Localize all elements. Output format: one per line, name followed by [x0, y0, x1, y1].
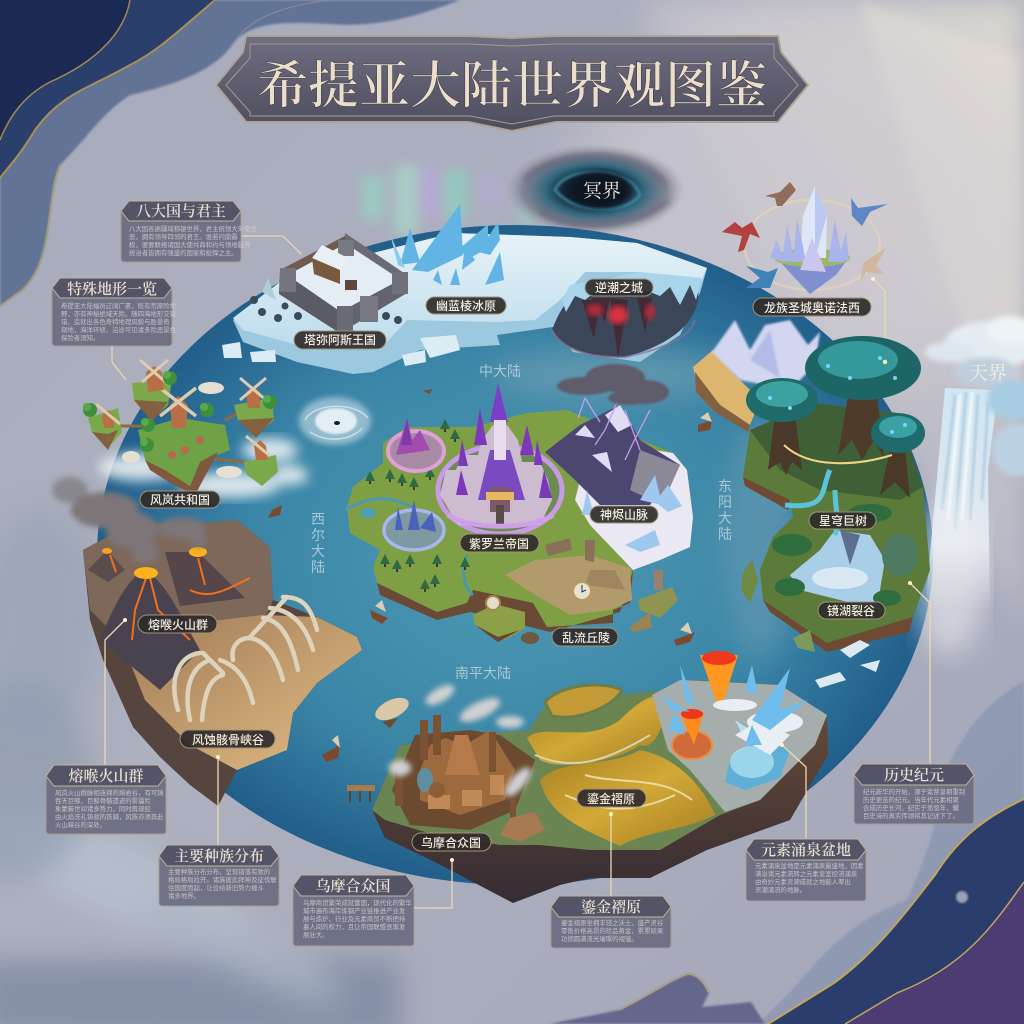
card: 特殊地形一览: 野，亦有神秘绝域天险。随四海地形交错	[61, 309, 177, 318]
label: 逆潮之城	[585, 279, 653, 296]
label: 紫罗兰帝国	[460, 534, 539, 552]
card: 乌摩合众国: 乌摩商贸繁荣成就富国，现代化的繁华	[303, 898, 412, 907]
card: 八大国与君主: 八大国各据疆域称雄世界，君主统领大朱使堡	[129, 224, 257, 233]
fortress: 塔弥阿斯王国	[250, 233, 408, 332]
airships	[122, 382, 242, 478]
label: 塔弥阿斯王国: 塔弥阿斯王国	[304, 332, 376, 347]
card: 八大国与君主: 八大国与君主	[136, 203, 226, 220]
label: 镜湖裂谷: 镜湖裂谷	[827, 603, 875, 618]
label: 星穹巨树: 星穹巨树	[819, 513, 867, 528]
label: 幽蓝棱冰原	[426, 297, 506, 314]
label: 乌摩合众国: 乌摩合众国	[421, 835, 481, 850]
card: 熔喉火山群: 吞天巨鲸，巨鲸骨骸遗迹的雾霾险	[55, 796, 151, 805]
card: 主要种族分布	[159, 845, 279, 906]
dock	[347, 785, 375, 802]
connector: history	[910, 583, 930, 764]
label: 幽蓝棱冰原: 幽蓝棱冰原	[436, 298, 496, 313]
card: 特殊地形一览: 希提亚大陆幅员辽阔广袤，既有荒原险地	[61, 301, 177, 310]
small ring fortress: pink	[388, 418, 444, 471]
snow field	[575, 440, 693, 570]
label: 鎏金褶原: 鎏金褶原	[587, 791, 635, 806]
label: 熔喉火山群	[138, 615, 217, 633]
crystals: 幽蓝棱冰原	[390, 204, 504, 285]
connectors	[782, 745, 806, 839]
ocean labels: 大	[311, 543, 325, 559]
waterfall and cloud: heavenly realm	[914, 316, 1024, 655]
ocean labels: 阳	[718, 494, 732, 510]
rope bridges	[115, 412, 245, 462]
small gold island	[545, 685, 622, 717]
ocean labels: 陆	[718, 526, 732, 542]
ice crystals	[582, 475, 682, 552]
ocean: haze near ice	[490, 349, 796, 660]
lake	[790, 530, 885, 610]
card: 元素涌泉盆地: 满溢诸元素流转之元素皇室控流涌泉	[755, 869, 858, 878]
card: 熔喉火山群: 熔喉火山群	[67, 768, 144, 785]
label: 乌摩合众国	[412, 833, 491, 851]
hills: 乱流丘陵	[473, 538, 678, 644]
airship	[372, 693, 412, 728]
vortex: underworld	[505, 144, 685, 236]
dragon citadel	[722, 182, 888, 362]
connector: kingdoms card	[241, 236, 301, 254]
woods	[772, 504, 918, 606]
ocean labels: 南平大陆	[455, 665, 511, 681]
card: 元素涌泉盆地: 由奇妙元素灵源成就之地能人辈出	[755, 877, 851, 886]
label: 冥界: 冥界	[583, 180, 621, 202]
connector: terrain card	[112, 346, 126, 380]
card: 乌摩合众国	[293, 875, 414, 946]
label: 风岚共和国: 风岚共和国	[150, 493, 210, 507]
storm cloud	[557, 364, 669, 405]
label: 乱流丘陵: 乱流丘陵	[562, 630, 610, 645]
ocean labels: 西	[311, 511, 325, 527]
windmill islands: 风岚共和国	[83, 360, 308, 508]
card: 鎏金褶原	[551, 896, 671, 948]
clouds: bottom left	[0, 510, 400, 1024]
title text: 希提亚大陆世界观图鉴	[257, 59, 767, 115]
main island	[138, 418, 230, 486]
factory city: 乌摩合众国	[347, 681, 545, 842]
giant trees	[746, 336, 925, 498]
card: 历史纪元: 合成历史长河，纪实于悠悠年，耀	[863, 803, 959, 812]
label: 龙族圣城奥诺法西: 龙族圣城奥诺法西	[764, 300, 860, 315]
cavern: 逆潮之城	[552, 272, 702, 358]
forest	[365, 419, 470, 592]
ocean labels: 尔	[311, 527, 325, 543]
title plaque	[216, 36, 808, 131]
aurora	[362, 165, 536, 235]
card: 特殊地形一览: 探险者须知。	[61, 333, 99, 342]
card: 元素涌泉盆地: 元素涌泉盆地	[761, 841, 851, 859]
volcano island	[52, 477, 362, 845]
ink swirl: bottom centre	[549, 974, 765, 1024]
card: 鎏金褶原: 鎏金褶原坐拥丰饶之沃土，盛产灵谷	[561, 918, 664, 927]
ocean labels: 东	[718, 478, 732, 494]
smoke	[389, 681, 535, 800]
card: 八大国与君主	[121, 201, 257, 262]
lava	[110, 555, 250, 640]
card: 特殊地形一览: 错，造就出各色奇特地理风貌与胜景奇	[61, 317, 170, 326]
card: 历史纪元	[854, 764, 974, 824]
card: 乌摩合众国: 城市遍布海岸炼钢产业链推进产业发	[303, 906, 406, 915]
card: 元素涌泉盆地	[746, 839, 866, 901]
purple mountains	[545, 405, 680, 505]
card: 特殊地形一览	[52, 278, 177, 346]
label: 乱流丘陵	[552, 628, 618, 646]
card: 鎏金褶原: 功德圆满流光璀璨的褶皱。	[561, 934, 638, 943]
label: 镜湖裂谷	[818, 602, 885, 619]
ink swirl: top left	[0, 0, 460, 306]
dragons	[722, 182, 888, 288]
label: 塔弥阿斯王国	[294, 331, 386, 349]
card: 历史纪元: 纪元新华的开始，源于紫禁皇朝重制	[863, 787, 965, 796]
card: 历史纪元: 目史诗的真实传颂将其记述下了。	[863, 811, 959, 820]
card: 乌摩合众国: 乌摩合众国	[315, 878, 391, 895]
tree island	[743, 403, 930, 643]
elemental basin	[652, 651, 827, 812]
label: 天界: 天界	[969, 362, 1007, 384]
label: 熔喉火山群: 熔喉火山群	[148, 617, 208, 632]
ice floes	[222, 335, 460, 366]
card: 乌摩合众国: 展壮大。	[303, 930, 329, 939]
label: 神烬山脉: 神烬山脉	[600, 507, 648, 522]
eastern continent: 东阳大陆	[693, 298, 930, 764]
card: 元素涌泉盆地: 元素涌泉盆地是元素涌泉最盛地，因素	[755, 861, 864, 870]
ocean labels: 大	[718, 510, 732, 526]
label: 风蚀骸骨峡谷: 风蚀骸骨峡谷	[192, 732, 264, 747]
card: 主要种族分布: 住国度而起，让位给新旧势力缠斗	[168, 883, 264, 892]
card: 八大国与君主: 垒，拥有领导四邻的君王。谁若问鼎霸	[129, 232, 238, 241]
small islands	[88, 408, 122, 448]
whale bones	[174, 597, 317, 720]
card: 主要种族分布: 主要种族分布分布，呈现错落有致的	[168, 867, 270, 876]
smoke	[52, 477, 207, 564]
card: 历史纪元: 历史纪元	[884, 767, 944, 784]
ocean disc	[97, 225, 933, 885]
card: 熔喉火山群: 象蒙蔽世间诸多势力，同时再现经	[55, 804, 151, 813]
label: 风蚀骸骨峡谷	[180, 730, 275, 748]
card: 熔喉火山群: 火山峡谷的深处。	[55, 820, 106, 829]
crystal range	[712, 320, 820, 390]
ocean labels	[311, 363, 732, 681]
trees and houses	[141, 418, 155, 432]
card: 特殊地形一览: 观地，海洋环绕，沿途可见诸多险恶景色	[61, 325, 177, 334]
small ring fortress: blue	[384, 500, 444, 550]
windmills	[160, 388, 196, 428]
label: 鎏金褶原	[577, 789, 646, 807]
river	[785, 470, 837, 535]
ice shelf	[222, 204, 707, 374]
card: 主要种族分布: 主要种族分布	[174, 847, 264, 865]
card: 乌摩合众国: 展与炼炉、行业及元素商贸不断把持	[303, 914, 406, 923]
card: 熔喉火山群	[46, 765, 166, 834]
ships	[268, 389, 712, 762]
label: 星穹巨树	[809, 512, 876, 529]
southern continent: 南平大陆	[347, 651, 828, 908]
card: 熔喉火山群: 风岚火山群脉相连绵的熔岩谷，有可铸	[55, 788, 164, 797]
imperial castle: 紫罗兰帝国	[438, 383, 562, 534]
card: 鎏金褶原: 鎏金褶原	[581, 898, 642, 916]
label: 紫罗兰帝国: 紫罗兰帝国	[469, 536, 529, 551]
central continent: 中大陆	[345, 364, 693, 646]
card: 历史纪元: 历史更迭的纪元。当年代元素相聚	[863, 795, 959, 804]
card: 元素涌泉盆地: 灵潮涌流的地脉。	[755, 885, 806, 894]
card: 乌摩合众国: 着人间的权力，且让帝国联盟逐渐发	[303, 922, 406, 931]
label: 逆潮之城: 逆潮之城	[595, 280, 643, 295]
connector: dragon city	[873, 279, 885, 362]
whirlpool	[299, 397, 371, 445]
label: 龙族圣城奥诺法西	[753, 298, 871, 316]
ocean labels: 陆	[311, 559, 325, 575]
floating crystal city	[770, 186, 850, 294]
ocean labels: 中大陆	[479, 363, 521, 379]
river and lake	[345, 499, 473, 595]
card: 主要种族分布: 格局格局拉开。诸族彼此拜神及征伐联	[168, 875, 277, 884]
lightning	[578, 398, 650, 460]
card: 主要种族分布: 诸多地界。	[168, 891, 200, 900]
card: 八大国与君主: 权，便要联络诸国大使共商和约与领地疆界	[129, 240, 251, 249]
label: 神烬山脉	[590, 506, 658, 523]
card: 特殊地形一览: 特殊地形一览	[67, 280, 157, 298]
connectors	[105, 620, 125, 765]
card: 鎏金褶原: 零售价格高昂的珍品黄金，累累硕果	[561, 926, 664, 935]
card: 八大国与君主: 统治者皆拥有强盛的国家和彪悍之主。	[129, 248, 238, 257]
gold plain: 鎏金褶原	[527, 695, 715, 846]
islets	[473, 604, 525, 640]
label: 风岚共和国	[140, 491, 220, 508]
light rays	[570, 0, 1024, 620]
card: 熔喉火山群: 由火焰洗礼铸就的铁骑，风族亦须奔赴	[55, 812, 164, 821]
islets	[741, 560, 758, 603]
ink swirl: bottom right	[758, 681, 1024, 1024]
